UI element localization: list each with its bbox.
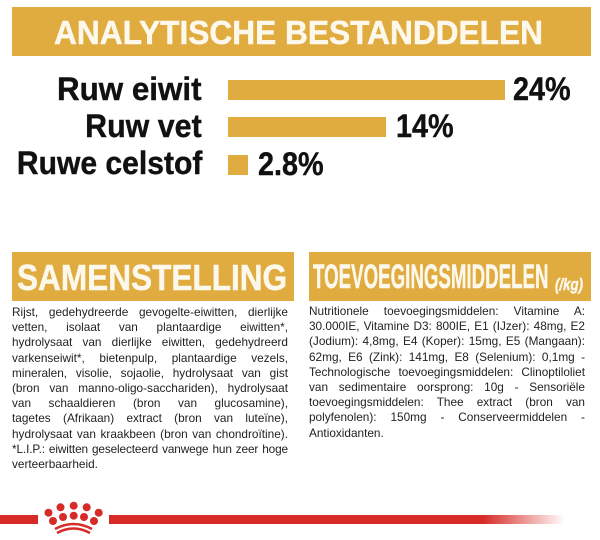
text block: samenstelling: mineralen, visolie, sojaolie, hydrolysaat van gist bbox=[12, 366, 288, 380]
panel: samenstelling header bbox=[12, 252, 294, 301]
rule: left bbox=[0, 515, 38, 524]
text block: toevoegingsmiddelen: Technologische toevoegingsmiddelen: Clinoptiloliet bbox=[309, 365, 585, 379]
label: ruw eiwit: Ruw eiwit bbox=[57, 70, 202, 106]
label: ruw vet: Ruw vet bbox=[85, 108, 202, 144]
text block: samenstelling: hydrolysaat van kraakbeen (bron van chondroïtine). bbox=[12, 426, 288, 440]
text block: toevoegingsmiddelen: 62mg, E6 (Zink): 141mg, E8 (Selenium): 0,1mg - bbox=[309, 350, 585, 364]
text block: samenstelling: vetten, isolaat van plantaardige eiwitten*, bbox=[12, 320, 288, 334]
text block: samenstelling: van schaaldieren (bron van glucosamine), bbox=[12, 396, 288, 410]
unit: per kg: (/kg) bbox=[555, 275, 583, 294]
text block: samenstelling: (bron van manno-oligo-sacchariden), hydrolysaat bbox=[12, 381, 288, 395]
text block: toevoegingsmiddelen bbox=[309, 304, 585, 440]
heading: toevoegingsmiddelen: TOEVOEGINGSMIDDELEN bbox=[313, 258, 549, 296]
bar: ruw vet bbox=[228, 117, 386, 137]
text block: samenstelling: Rijst, gedehydreerde gevogelte-eiwitten, dierlijke bbox=[12, 305, 288, 319]
text block: samenstelling: varkenseiwit*, bietenpulp, plantaardige vezels, bbox=[12, 351, 288, 365]
panel: toevoegingsmiddelen header bbox=[309, 252, 591, 301]
text block: toevoegingsmiddelen: Nutritionele toevoegingsmiddelen: Vitamine A: bbox=[309, 304, 585, 318]
text block: samenstelling: *L.I.P.: eiwitten geselecteerd vanwege hun zeer hoge bbox=[12, 442, 288, 456]
heading: analytische bestanddelen: ANALYTISCHE BESTANDDELEN bbox=[54, 14, 543, 52]
label: ruwe celstof: Ruwe celstof bbox=[16, 144, 202, 180]
text block: samenstelling bbox=[12, 305, 288, 471]
text block: samenstelling: verteerbaarheid. bbox=[12, 457, 98, 471]
heading: samenstelling: SAMENSTELLING bbox=[17, 256, 287, 298]
panel: analytical constituents header bbox=[12, 7, 591, 56]
value: 14%: 14% bbox=[396, 108, 454, 144]
text block: samenstelling: tagetes (Afrikaan) extract (bron van luteïne), bbox=[12, 411, 288, 425]
footer: red rule with crown logo bbox=[0, 502, 562, 534]
bar: ruwe celstof bbox=[228, 155, 248, 174]
text block: samenstelling: hydrolysaat van dierlijke eiwitten, gedehydreerd bbox=[12, 335, 288, 349]
text block: toevoegingsmiddelen: Antioxidanten. bbox=[309, 426, 384, 440]
text block: toevoegingsmiddelen: toevoegingsmiddelen: Thee extract (bron van bbox=[309, 395, 585, 409]
value: 2.8%: 2.8% bbox=[258, 146, 324, 182]
value: 24%: 24% bbox=[513, 71, 571, 107]
text block: toevoegingsmiddelen: polyfenolen): 150mg - Conserveermiddelen - bbox=[309, 410, 585, 424]
icon: royal canin crown bbox=[44, 502, 103, 533]
rule: right bbox=[109, 515, 565, 524]
text block: toevoegingsmiddelen: 30.000IE, Vitamine D3: 800IE, E1 (IJzer): 48mg, E2 bbox=[309, 319, 585, 333]
text block: toevoegingsmiddelen: (Jodium): 4,8mg, E4 (Koper): 15mg, E5 (Mangaan): bbox=[309, 334, 585, 348]
text block: toevoegingsmiddelen: van sedimentaire oorsprong: 10g - Sensoriële bbox=[309, 380, 585, 394]
bar: ruw eiwit bbox=[228, 80, 505, 100]
